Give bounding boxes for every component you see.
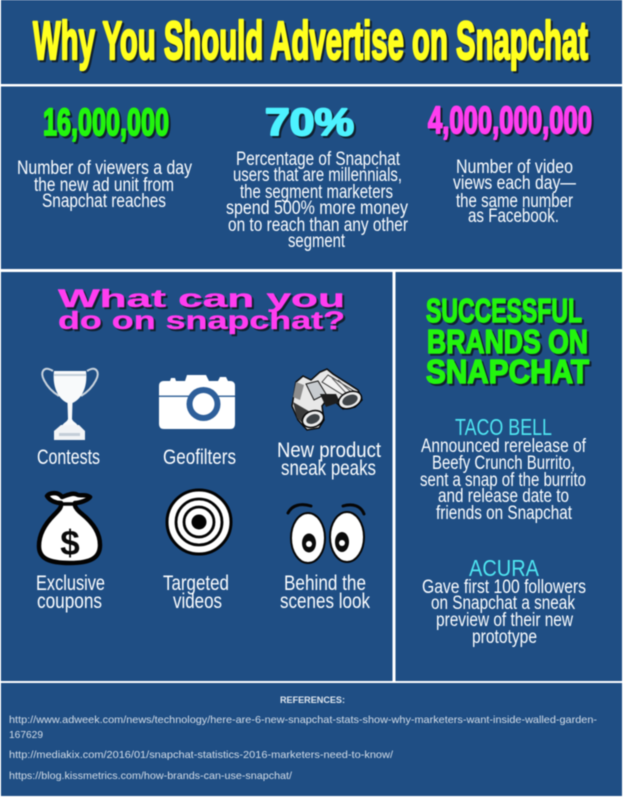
heading: what can you do [58, 285, 345, 335]
label: exclusive coupons: coupons [37, 590, 102, 613]
icon: money bag: $ [60, 524, 80, 563]
stat: video views: as Facebook. [468, 206, 559, 227]
brand: taco bell: Beefy Crunch Burrito, [432, 453, 575, 474]
panel: successful brands [396, 272, 622, 681]
label: geofilters: Geofilters [163, 446, 236, 469]
stat: viewers [17, 102, 192, 212]
label: targeted videos: Targeted [163, 572, 229, 595]
label: exclusive coupons: Exclusive [36, 572, 105, 595]
brand: taco bell: Announced rerelease of [421, 436, 587, 457]
brand: taco bell: sent a snap of the burrito [420, 470, 586, 491]
label: new product sneak peaks [277, 439, 381, 480]
stat: millennials [226, 102, 409, 252]
brand: taco bell [420, 414, 587, 524]
stat: viewers: 16,000,000 [43, 102, 169, 144]
icon: camera [159, 375, 235, 429]
panel: title [1, 0, 622, 84]
brand: acura: on Snapchat a sneak [431, 593, 575, 614]
references list: 167629 [9, 729, 43, 741]
stat: millennials: 70% [265, 102, 354, 144]
label: new product sneak peaks: New product [277, 439, 381, 462]
heading: successful brands: SNAPCHAT [426, 353, 589, 390]
references heading: REFERENCES: [280, 695, 345, 706]
brand: taco bell: friends on Snapchat [436, 503, 573, 524]
icon: money bag [39, 493, 100, 563]
brand: taco bell: TACO BELL [455, 414, 552, 440]
brand: acura [422, 555, 586, 648]
label: exclusive coupons [36, 572, 105, 613]
brand: acura: preview of their new [436, 610, 573, 631]
stat: video views: views each day— [453, 173, 576, 194]
label: new product sneak peaks: sneak peaks [281, 457, 376, 480]
brand: acura: prototype [472, 627, 537, 648]
references list: https://blog.kissmetrics.com/how-brands-can-use-snapchat/ [9, 770, 292, 782]
stat: viewers: Number of viewers a day [17, 158, 192, 179]
stat: millennials: the segment marketers [240, 182, 393, 203]
brand: taco bell: and release date to [438, 486, 569, 507]
label: targeted videos: videos [173, 590, 222, 613]
stat: millennials: spend 500% more money [226, 198, 408, 219]
label: contests: Contests [37, 446, 100, 469]
label: behind the scenes look: Behind the [284, 572, 366, 595]
stat: millennials: Percentage of Snapchat [236, 149, 401, 170]
label: behind the scenes look [280, 572, 370, 613]
stat: viewers: the new ad unit from [34, 175, 174, 196]
brand: acura: ACURA [469, 555, 540, 581]
icon: target [167, 490, 231, 554]
heading: successful brands: BRANDS ON [427, 323, 588, 360]
references list: http://www.adweek.com/news/technology/here-are-6-new-snapchat-stats-show-why-marketers-want-inside-walled-garden- [9, 714, 598, 726]
stat: millennials: on to reach than any other [228, 215, 409, 236]
stat: video views [428, 100, 592, 227]
heading: what can you do: do on snapchat? [58, 307, 345, 335]
stat: millennials: users that are millennials, [233, 165, 402, 186]
panel: statistics [1, 86, 622, 269]
stat: video views: the same number [456, 191, 574, 212]
stat: video views: Number of video [456, 157, 573, 178]
brand: acura: Gave first 100 followers [422, 577, 586, 598]
icon: trophy [42, 369, 98, 440]
references list [9, 714, 598, 782]
label: targeted videos [163, 572, 229, 613]
heading: what can you do: What can you [58, 285, 345, 313]
label: behind the scenes look: scenes look [280, 590, 370, 613]
icon: binoculars [292, 369, 364, 431]
panel: references [1, 683, 622, 796]
icon: eyes [288, 505, 364, 563]
references list: http://mediakix.com/2016/01/snapchat-statistics-2016-marketers-need-to-know/ [9, 749, 393, 761]
heading: successful brands [426, 292, 589, 390]
stat: viewers: Snapchat reaches [42, 191, 166, 212]
panel: what can you do [1, 272, 392, 681]
stat: millennials: segment [288, 231, 346, 252]
